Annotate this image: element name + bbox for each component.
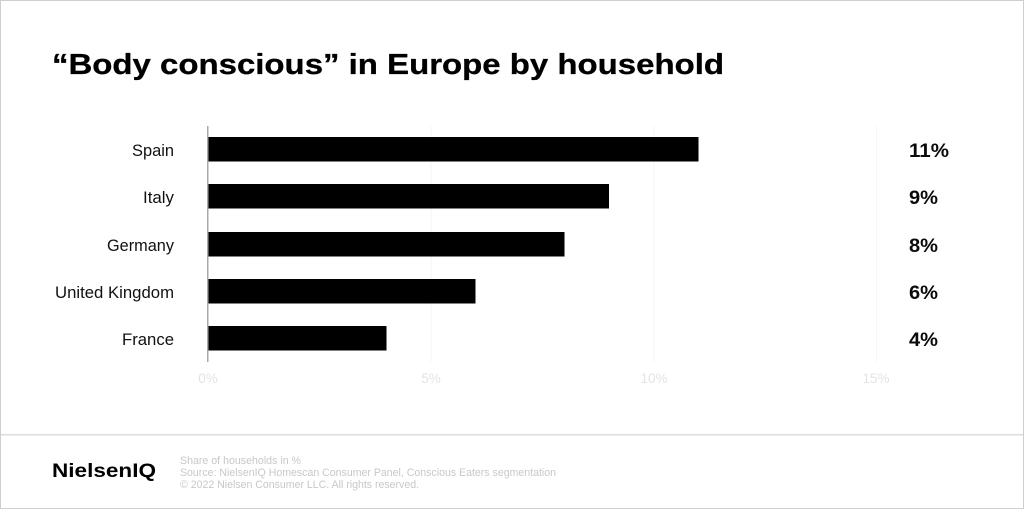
footer notes	[180, 455, 556, 491]
footer notes: Source: NielsenIQ Homescan Consumer Panel, Conscious Eaters segmentation	[180, 467, 556, 479]
bars	[208, 137, 698, 350]
value labels: 6%	[909, 283, 938, 304]
value labels: 8%	[909, 236, 938, 257]
axis tick labels: 0%	[198, 371, 218, 386]
footer notes: © 2022 Nielsen Consumer LLC. All rights reserved.	[180, 479, 419, 491]
value labels: 9%	[909, 188, 938, 209]
value labels	[909, 141, 949, 351]
country labels: United Kingdom	[55, 284, 174, 302]
axis line	[207, 126, 208, 362]
bar chart	[55, 126, 949, 386]
axis tick labels: 10%	[640, 371, 668, 386]
value labels: 11%	[909, 141, 949, 162]
country labels: Italy	[143, 189, 175, 207]
value labels: 4%	[909, 330, 938, 351]
country labels	[55, 142, 175, 349]
country labels: Spain	[132, 142, 174, 160]
logo: NielsenIQ: NielsenIQ	[52, 460, 156, 482]
footer divider	[1, 434, 1023, 436]
country labels: France	[122, 331, 174, 349]
country labels: Germany	[107, 237, 175, 255]
title: “Body conscious” in Europe by household	[52, 49, 724, 81]
axis tick labels	[198, 371, 890, 386]
axis tick labels: 15%	[862, 371, 890, 386]
footer notes: Share of households in %	[180, 455, 301, 467]
axis tick labels: 5%	[421, 371, 441, 386]
